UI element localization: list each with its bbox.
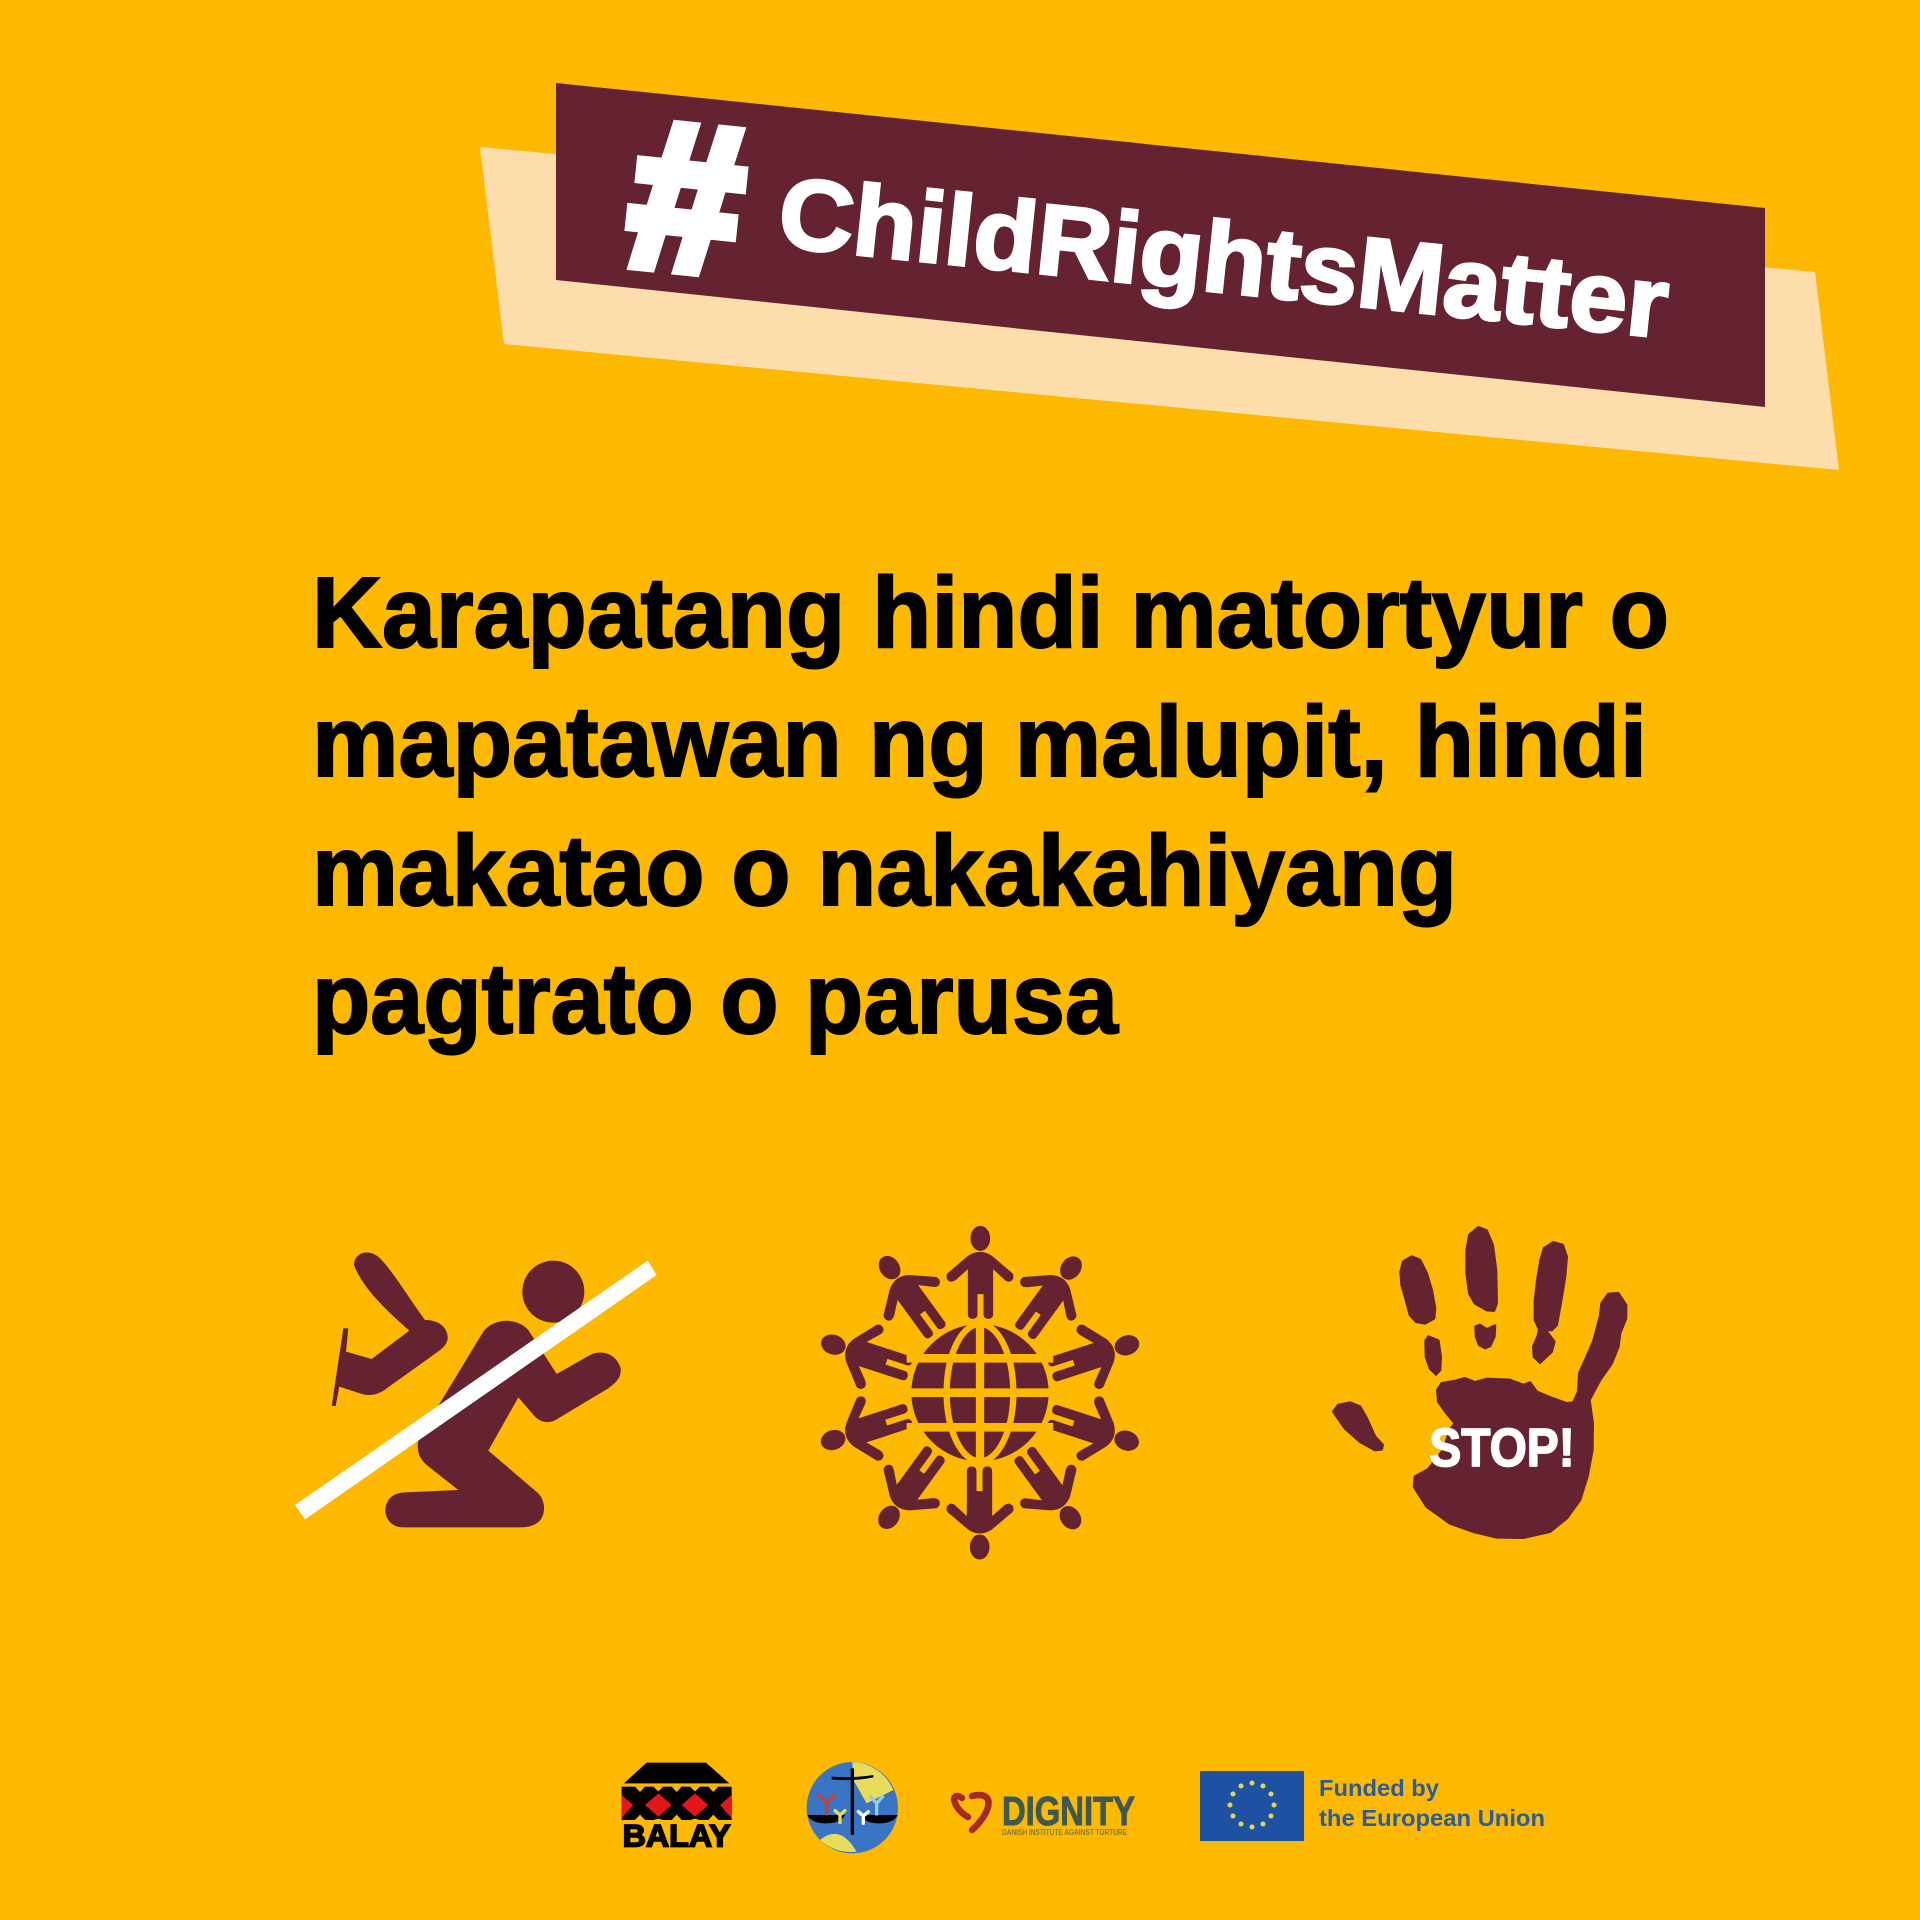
heading: right statement: Karapatang hindi matortyur o <box>312 557 1669 669</box>
banner: hashtag <box>480 78 1839 470</box>
finger prints <box>1333 1227 1567 1450</box>
palm and thumb <box>1414 1293 1626 1538</box>
logo: DIGNITY <box>954 1788 1135 1837</box>
woven red and black band <box>622 1787 732 1820</box>
funded by text: the European Union <box>1319 1805 1545 1831</box>
roof <box>624 1763 729 1783</box>
yellow patches <box>820 1762 893 1852</box>
icon: people around globe <box>812 1227 1148 1559</box>
banner cream backing <box>480 147 1839 470</box>
hash symbol: # <box>619 78 754 319</box>
funded by text <box>1319 1775 1545 1831</box>
funded by text: Funded by <box>1319 1775 1439 1801</box>
seal disc <box>807 1762 898 1853</box>
figures <box>818 1795 883 1823</box>
white strike bar <box>295 1261 657 1519</box>
icon: crossed-out beating of kneeling person <box>295 1253 657 1527</box>
banner maroon strip <box>556 83 1765 407</box>
dignity tagline: DANISH INSTITUTE AGAINST TORTURE <box>1002 1828 1128 1837</box>
balay wordmark: BALAY <box>623 1819 731 1854</box>
EU flag <box>1200 1771 1304 1841</box>
scales of justice <box>807 1768 898 1835</box>
heading: right statement: makatao o nakakahiyang <box>312 815 1457 927</box>
logo: European Union <box>1200 1771 1545 1841</box>
kneeling body <box>385 1321 621 1527</box>
dignity wordmark: DIGNITY <box>1002 1788 1135 1834</box>
globe <box>907 1322 1053 1463</box>
heading: right statement <box>312 557 1669 1055</box>
heading: right statement: mapatawan ng malupit, hindi <box>312 686 1647 798</box>
ring of people <box>812 1227 1148 1559</box>
logo: justice seal <box>807 1762 898 1853</box>
head <box>522 1261 584 1323</box>
club and arm <box>332 1253 448 1406</box>
stop label: STOP! <box>1429 1419 1575 1478</box>
icon: stop handprint <box>1333 1227 1626 1538</box>
hashtag text: ChildRightsMatter <box>774 156 1674 360</box>
heading: right statement: pagtrato o parusa <box>312 943 1119 1055</box>
heart mark <box>954 1795 989 1830</box>
logo: Balay <box>622 1763 732 1854</box>
